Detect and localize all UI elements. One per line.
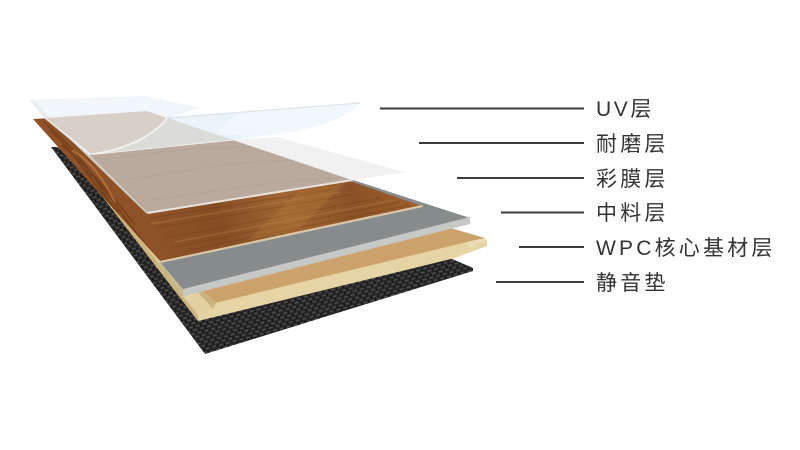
UV sheet over wear film [46, 111, 167, 154]
flooring layer diagram [30, 96, 584, 354]
label: color film layer: 彩膜层 [596, 168, 669, 191]
layer: sound-absorbing pad [51, 147, 473, 354]
layer: UV coat [30, 96, 360, 156]
layer: wear film [48, 112, 405, 214]
layer: WPC core [102, 190, 487, 321]
leader: middle layer [501, 212, 584, 214]
label: UV layer: UV层 [596, 98, 654, 121]
layer: middle material [157, 180, 470, 296]
layer: color film wood [33, 112, 423, 263]
label: middle layer: 中料层 [596, 202, 669, 225]
label: WPC core layer: WPC核心基材层 [596, 237, 776, 260]
label: wear layer: 耐磨层 [596, 133, 669, 156]
leader: color film layer [457, 177, 584, 179]
leader: wear layer [419, 142, 584, 144]
leader: WPC core [519, 246, 584, 248]
leader: pad [496, 281, 584, 283]
label: sound pad: 静音垫 [596, 272, 669, 295]
leader: UV layer [380, 108, 584, 110]
